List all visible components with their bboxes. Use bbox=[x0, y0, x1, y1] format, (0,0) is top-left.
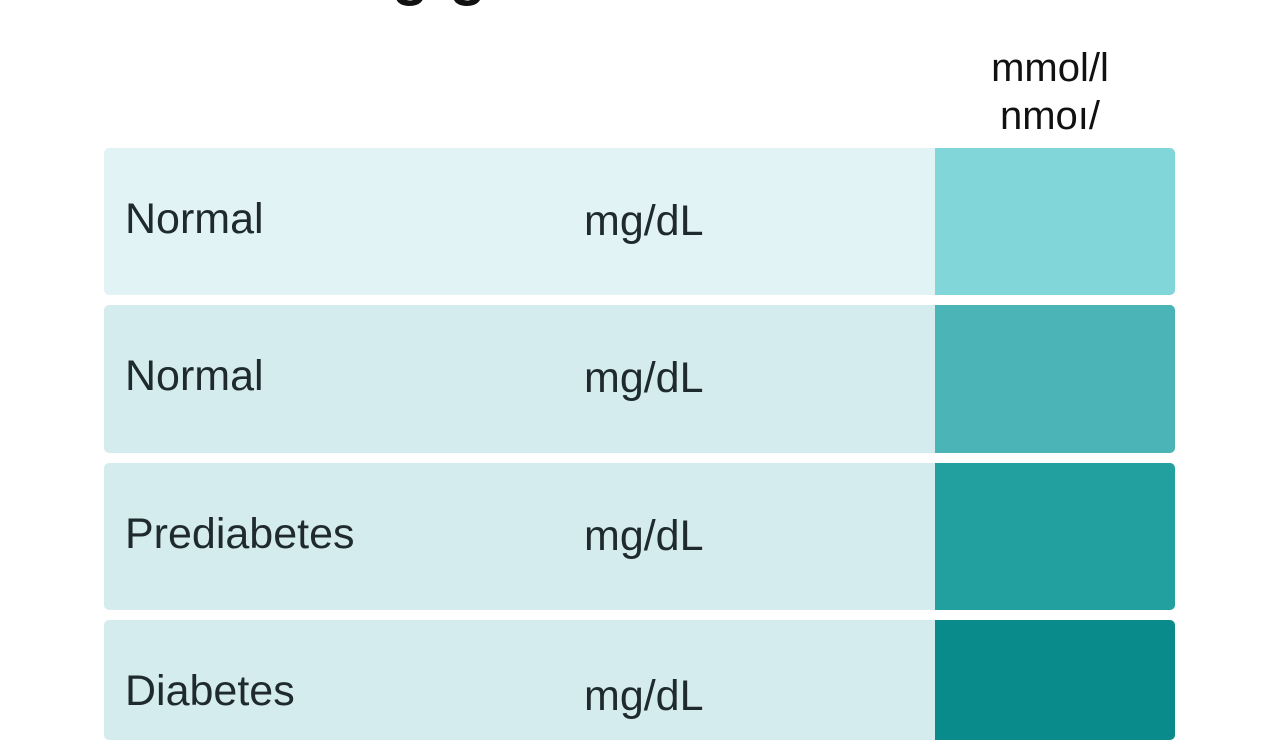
row: Prediabetes: Prediabetes bbox=[125, 510, 354, 558]
header: mmol/l bbox=[991, 46, 1109, 138]
row: Normal 1: mg/dL bbox=[584, 197, 704, 245]
row: Normal 1 bbox=[104, 148, 1175, 295]
row: Normal 2 bbox=[104, 305, 1175, 453]
header: mmol/l: nmoı/ bbox=[1000, 94, 1100, 138]
row: Prediabetes bbox=[104, 463, 1175, 610]
row: Diabetes: mg/dL bbox=[584, 672, 704, 720]
row: Normal 2: mg/dL bbox=[584, 354, 704, 402]
header: mmol/l: mmol/l bbox=[991, 46, 1109, 90]
row: Prediabetes: mg/dL bbox=[584, 512, 704, 560]
row: Diabetes bbox=[104, 620, 1175, 740]
row: Normal 2: Normal bbox=[125, 352, 264, 400]
row: Normal 1: Normal bbox=[125, 195, 264, 243]
row: Diabetes: Diabetes bbox=[125, 667, 295, 715]
